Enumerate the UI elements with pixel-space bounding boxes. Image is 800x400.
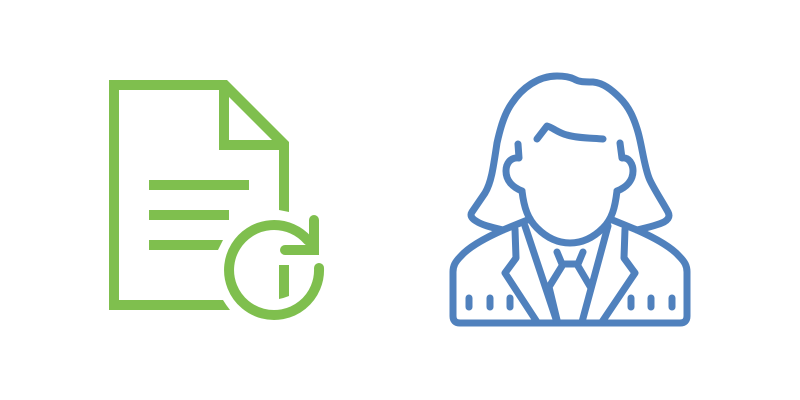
face (522, 191, 617, 243)
right lapels (582, 226, 635, 322)
right jacket buttons (631, 298, 672, 307)
hair (471, 76, 669, 230)
left jacket buttons (469, 298, 510, 307)
refresh arc (229, 225, 319, 315)
right ear (617, 143, 633, 191)
document outline (109, 80, 289, 310)
icon: businesswoman (453, 76, 687, 323)
shoulders and jacket outline (453, 219, 687, 323)
document lower right edge (279, 265, 289, 299)
left ear (506, 144, 522, 191)
document text lines (149, 180, 249, 250)
refresh arrowhead (285, 220, 314, 250)
icon: document with refresh arrow (109, 80, 319, 315)
document folded corner (229, 97, 272, 140)
tie (549, 252, 591, 320)
fringe (537, 126, 603, 139)
left lapels (505, 226, 557, 322)
